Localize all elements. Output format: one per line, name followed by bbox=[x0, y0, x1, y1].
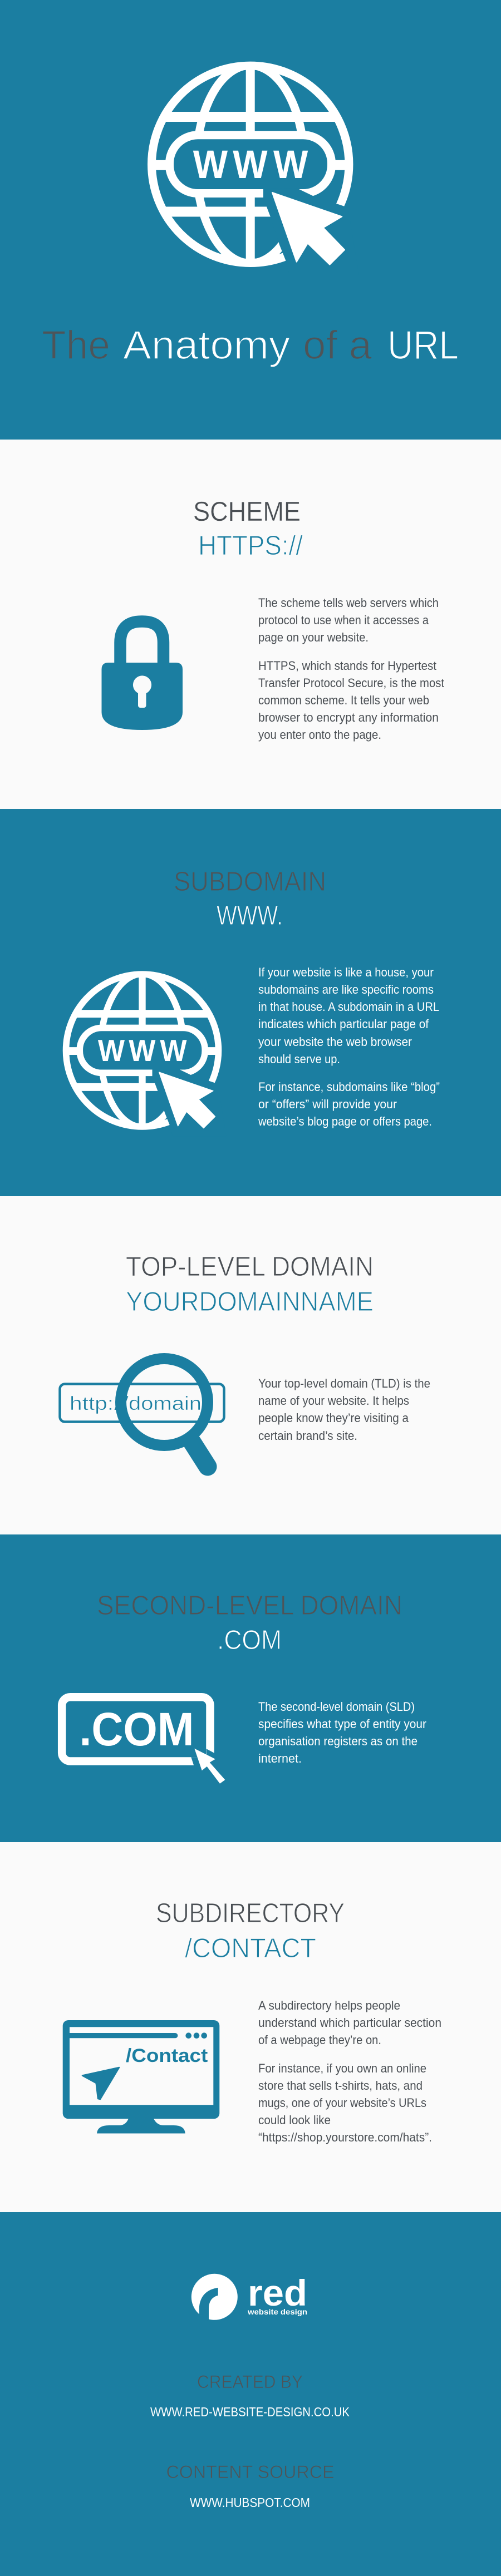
text block: subdirectory description: For instance, if you own an online bbox=[258, 2061, 426, 2075]
logo: red website design: website design bbox=[247, 2307, 307, 2316]
icon: magnifier over url bar: // bbox=[114, 1393, 129, 1414]
heading: second-level domain: .COM bbox=[217, 1625, 282, 1655]
panel: top-level domain bbox=[0, 1196, 501, 1534]
text block: second-level domain description bbox=[258, 1700, 426, 1765]
title: Anatomy bbox=[123, 323, 290, 368]
text block: subdomain description: If your website is like a house, your bbox=[258, 965, 434, 979]
credit: created by: CREATED BY bbox=[197, 2372, 303, 2392]
title bbox=[42, 323, 459, 368]
heading: top-level domain: YOURDOMAINNAME bbox=[126, 1287, 374, 1317]
panel: hero header bbox=[0, 0, 501, 440]
text block: subdomain description: should serve up. bbox=[258, 1052, 340, 1066]
heading: top-level domain: TOP-LEVEL DOMAIN bbox=[126, 1252, 374, 1282]
icon: monitor with contact page and arrow: /Contact bbox=[126, 2045, 208, 2066]
heading: subdomain: WWW. bbox=[217, 901, 283, 931]
text block: scheme description: page on your website. bbox=[258, 630, 369, 644]
text block: scheme description bbox=[258, 596, 444, 742]
text block: scheme description: protocol to use when it accesses a bbox=[258, 613, 429, 627]
logo: red website design: red bbox=[248, 2272, 307, 2313]
panel: scheme bbox=[0, 440, 501, 809]
text block: second-level domain description: The second-level domain (SLD) bbox=[258, 1700, 415, 1714]
icon: globe with www and cursor: WWW bbox=[193, 142, 308, 187]
text block: subdirectory description: “https://shop.yourstore.com/hats”. bbox=[258, 2130, 432, 2144]
text block: subdirectory description: could look like bbox=[258, 2113, 331, 2127]
text block: scheme description: common scheme. It tells your web bbox=[258, 693, 429, 707]
icon: .com box with cursor: .COM bbox=[79, 1703, 194, 1755]
credit: content source bbox=[166, 2462, 334, 2510]
text block: second-level domain description: internet. bbox=[258, 1751, 302, 1765]
text block: subdirectory description: of a webpage they’re on. bbox=[258, 2033, 381, 2047]
icon: globe with www and cursor bbox=[61, 971, 226, 1136]
credit: created by: WWW.RED-WEBSITE-DESIGN.CO.UK bbox=[150, 2405, 350, 2419]
logo: red website design bbox=[191, 2272, 307, 2321]
text block: subdomain description: your website the web browser bbox=[258, 1035, 412, 1049]
title: The bbox=[42, 323, 110, 368]
text block: subdomain description: indicates which particular page of bbox=[258, 1017, 429, 1031]
text block: top-level domain description bbox=[258, 1376, 430, 1443]
panel: subdirectory bbox=[0, 1842, 501, 2212]
text block: subdirectory description: mugs, one of your website’s URLs bbox=[258, 2096, 426, 2110]
icon: .com box with cursor bbox=[62, 1697, 225, 1784]
text block: top-level domain description: people know they’re visiting a bbox=[258, 1411, 409, 1425]
text block: subdirectory description: store that sells t-shirts, hats, and bbox=[258, 2079, 423, 2093]
icon: padlock bbox=[101, 621, 183, 730]
text block: top-level domain description: name of your website. It helps bbox=[258, 1394, 409, 1408]
panel: footer bbox=[0, 2212, 501, 2576]
text block: subdomain description: in that house. A subdomain in a URL bbox=[258, 1000, 439, 1014]
text block: subdirectory description: understand which particular section bbox=[258, 2016, 441, 2030]
text block: subdomain description: or “offers” will provide your bbox=[258, 1097, 397, 1111]
icon: magnifier over url bar: domain bbox=[129, 1393, 202, 1414]
text block: scheme description: browser to encrypt any information bbox=[258, 710, 439, 724]
text block: second-level domain description: organisation registers as on the bbox=[258, 1734, 418, 1748]
text block: top-level domain description: certain brand’s site. bbox=[258, 1429, 357, 1443]
icon: magnifier over url bar bbox=[60, 1359, 224, 1467]
heading: second-level domain bbox=[97, 1591, 402, 1655]
credit: content source: WWW.HUBSPOT.COM bbox=[190, 2495, 310, 2510]
text block: subdirectory description: A subdirectory helps people bbox=[258, 1998, 400, 2012]
heading: subdomain: SUBDOMAIN bbox=[174, 867, 326, 897]
credit: content source: CONTENT SOURCE bbox=[166, 2462, 334, 2482]
text block: subdomain description: For instance, subdomains like “blog” bbox=[258, 1080, 440, 1094]
panel: second-level domain bbox=[0, 1534, 501, 1842]
icon: globe with www and cursor: WWW bbox=[98, 1034, 187, 1068]
icon: magnifier over url bar: http: bbox=[70, 1393, 114, 1414]
title: URL bbox=[387, 323, 459, 368]
heading: second-level domain: SECOND-LEVEL DOMAIN bbox=[97, 1591, 402, 1621]
heading: scheme: HTTPS:// bbox=[198, 531, 303, 561]
heading: subdirectory: /CONTACT bbox=[185, 1933, 316, 1963]
text block: second-level domain description: specifies what type of entity your bbox=[258, 1717, 426, 1731]
heading: scheme: SCHEME bbox=[193, 497, 301, 527]
heading: subdirectory: SUBDIRECTORY bbox=[156, 1898, 345, 1928]
credit: created by bbox=[150, 2372, 350, 2419]
text block: scheme description: HTTPS, which stands for Hypertest bbox=[258, 659, 436, 673]
heading: top-level domain bbox=[126, 1252, 374, 1317]
text block: top-level domain description: Your top-level domain (TLD) is the bbox=[258, 1376, 430, 1390]
heading: scheme bbox=[193, 497, 303, 561]
text block: scheme description: The scheme tells web servers which bbox=[258, 596, 439, 610]
text block: subdomain description: subdomains are like specific rooms bbox=[258, 983, 434, 996]
title: of a bbox=[303, 323, 372, 368]
text block: subdomain description: website’s blog page or offers page. bbox=[258, 1114, 432, 1128]
text block: subdirectory description bbox=[258, 1998, 441, 2144]
text block: scheme description: Transfer Protocol Secure, is the most bbox=[258, 676, 444, 690]
panel: subdomain bbox=[0, 809, 501, 1196]
icon: monitor with contact page and arrow bbox=[63, 2020, 219, 2133]
text block: scheme description: you enter onto the page. bbox=[258, 728, 381, 742]
heading: subdirectory bbox=[156, 1898, 345, 1963]
heading: subdomain bbox=[174, 867, 326, 931]
icon: globe with www and cursor bbox=[145, 61, 359, 275]
text block: subdomain description bbox=[258, 965, 440, 1128]
